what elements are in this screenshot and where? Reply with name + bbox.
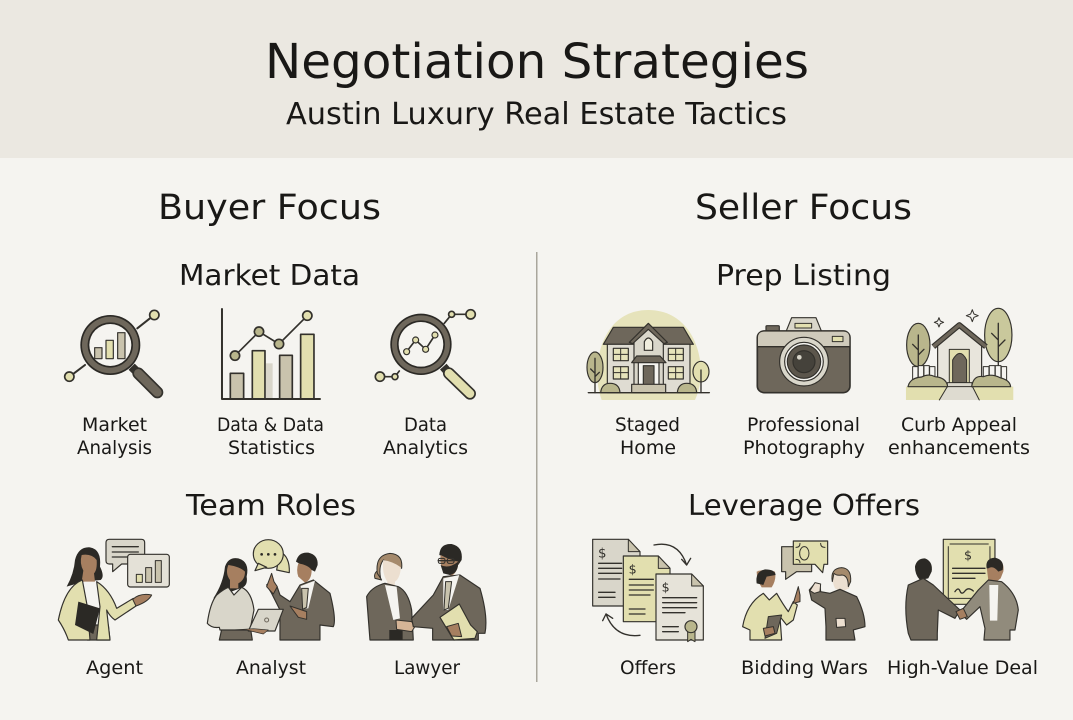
label: Staged Home [615, 414, 680, 459]
label: Professional Photography [743, 414, 865, 459]
center divider [536, 252, 538, 682]
heading: Team Roles: Team Roles [185, 489, 356, 522]
label: Curb Appeal enhancements: Curb Appeal [901, 414, 1017, 436]
icon: agent [58, 539, 169, 640]
subtitle: Austin Luxury Real Estate Tactics [286, 97, 787, 132]
label: Curb Appeal enhancements [888, 414, 1030, 459]
label: Data & Data Statistics: Data & Data [217, 414, 324, 436]
heading: Buyer Focus: Buyer Focus [158, 188, 381, 228]
label: High-Value Deal: High-Value Deal [887, 657, 1038, 679]
label: Market Analysis: Market [82, 414, 147, 436]
icon: market analysis magnifier [65, 310, 159, 392]
label: Data Analytics [383, 414, 468, 459]
label: Agent: Agent [86, 657, 143, 679]
icon: camera [757, 318, 850, 393]
title: Negotiation Strategies [265, 34, 809, 90]
label: Data Analytics: Data [404, 414, 447, 436]
label: Professional Photography: Professional [747, 414, 860, 436]
icon: offers documents: $ [662, 579, 670, 594]
label: Data & Data Statistics: Statistics [228, 437, 315, 459]
label: Staged Home: Staged [615, 414, 680, 436]
heading: Leverage Offers: Leverage Offers [688, 489, 920, 522]
heading: Prep Listing: Prep Listing [716, 259, 891, 292]
label: Analyst: Analyst [236, 657, 306, 679]
icon: data statistics chart [222, 309, 320, 399]
icon: lawyer [367, 544, 486, 640]
icon: offers documents [593, 539, 703, 642]
label: Staged Home: Home [620, 437, 676, 459]
icon: offers documents: $ [629, 561, 637, 576]
label: Lawyer: Lawyer [394, 657, 460, 679]
header band [0, 0, 1073, 158]
label: Data Analytics: Analytics [383, 437, 468, 459]
label: Market Analysis: Analysis [77, 437, 152, 459]
label: Market Analysis [77, 414, 152, 459]
icon: staged home [587, 310, 709, 400]
icon: data analytics magnifier [375, 310, 475, 394]
label: Bidding Wars: Bidding Wars [741, 657, 868, 679]
heading: Market Data: Market Data [179, 259, 360, 292]
icon: curb appeal house [906, 308, 1013, 400]
icon: analyst [207, 540, 334, 640]
icon: high-value deal [906, 539, 1018, 640]
icon: offers documents: $ [598, 546, 606, 561]
label: Offers: Offers [620, 657, 676, 679]
label: Curb Appeal enhancements: enhancements [888, 437, 1030, 459]
icon: bidding wars [743, 541, 865, 640]
label: Professional Photography: Photography [743, 437, 865, 459]
heading: Seller Focus: Seller Focus [695, 188, 912, 228]
label: Data & Data Statistics [217, 414, 324, 459]
icon: high-value deal: $ [964, 547, 972, 562]
